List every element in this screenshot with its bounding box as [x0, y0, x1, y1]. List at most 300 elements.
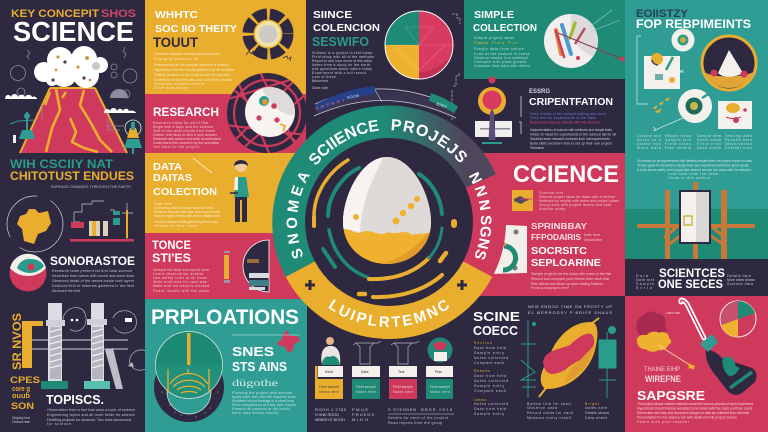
bracket — [519, 96, 521, 134]
heading line 2: SOC IIO THEITY — [155, 24, 237, 35]
text block left: Compare each — [474, 361, 504, 365]
text block: Sample the field and report here — [153, 268, 209, 272]
side text left: Extra — [636, 286, 652, 290]
text block: Last of these — [312, 75, 336, 79]
text block: Make sure the result is checked — [153, 284, 209, 288]
caption line: SURFACE CHANGES THROUGH THE EARTH — [51, 185, 131, 189]
panel: easel on green — [625, 182, 768, 259]
text block: Testing variables of the world to see the outcome — [154, 73, 230, 77]
heading line 2: STI'ES — [152, 251, 191, 265]
arc band — [314, 89, 456, 118]
card 1 — [315, 366, 343, 399]
four column text: Data check — [697, 146, 721, 150]
panel: yellow whitc — [145, 0, 306, 95]
decorative glyphs — [452, 14, 460, 120]
icon: teal circle — [428, 338, 452, 362]
text block: Scientists record the data and collect the results — [154, 78, 232, 82]
side text right: Science data — [727, 282, 753, 286]
icon: research net circle — [225, 72, 307, 155]
diagram: crystal circle — [7, 196, 63, 252]
text block: sonorastoe: Describes from nature with sound and wave tests — [52, 274, 134, 278]
text block bottom: Observe data — [527, 406, 557, 410]
text block: Remember each step and document changes as data are collected from each trial — [637, 411, 749, 415]
heading: WHHTC — [155, 10, 198, 21]
text block: Plot — [508, 41, 518, 45]
panel: prploations — [145, 299, 307, 432]
text block: Plan ahead and clean up when testing finishes — [531, 282, 603, 286]
text block: Notes on ideas for experiments in the science lab for all — [530, 132, 616, 136]
text block: Students record findings in a chart form — [232, 399, 294, 403]
ring text right upper: NNN — [469, 172, 490, 210]
text block left: Ideas — [474, 398, 486, 402]
text rows under cards: PRUEDS — [352, 412, 374, 417]
panel: scine coecc — [473, 304, 616, 420]
yellow labels — [10, 375, 40, 411]
subheading: dügothe — [232, 378, 278, 388]
text block bottom — [527, 402, 609, 420]
heading line 2: FFPODAIRIS — [531, 233, 582, 242]
text block left: Sample entry — [474, 384, 504, 388]
arrow — [658, 345, 695, 370]
heading line 2: COLENCION — [313, 23, 380, 34]
bracket and pointer — [637, 36, 690, 131]
icon: easel — [637, 182, 755, 259]
heading line 1: TONCE — [152, 238, 191, 252]
text block — [637, 402, 753, 424]
text block centered: Close of this section — [668, 176, 710, 180]
text block: data: Data here — [154, 202, 172, 206]
text block: Compare with plant growth — [474, 60, 526, 64]
icon: crimson star — [276, 330, 300, 353]
four column text: Another note — [725, 146, 752, 150]
four column text: Sample text — [665, 138, 691, 142]
ring text science: SCIIENCE — [309, 120, 379, 164]
row: four experiment cards — [315, 337, 454, 425]
ring: right crimson segment — [477, 181, 489, 269]
icon: scientist figure — [321, 337, 340, 365]
text block bottom: Details shown — [585, 411, 609, 415]
text block: topics: Observation from a fact that uses a topic of science — [47, 408, 135, 412]
text block: More data shows results — [232, 411, 278, 415]
text block centered — [637, 159, 752, 180]
card 1: Notes here — [319, 390, 339, 394]
text block: Scientific research testing based methods — [154, 52, 220, 56]
ring text projects: PROJEJS — [392, 119, 467, 162]
yellow labels: core g — [12, 386, 30, 393]
panel: science collection pie — [312, 10, 460, 120]
text block: Use safety rules at all times — [153, 276, 207, 280]
heading: shos: SHOS — [101, 8, 136, 20]
heading large: SAPGSRE — [637, 388, 705, 403]
card 2: Field sample — [356, 385, 376, 389]
text block: topics: for science — [47, 422, 71, 426]
text block: Present all projects to the public — [232, 407, 290, 411]
text block bottom: Data sheet — [585, 416, 607, 420]
small heading: NEW ENDOO TIME ON FROSTY UP — [528, 304, 612, 309]
panel: ccience crimson — [464, 153, 625, 296]
heading line 2: COLLECTION — [473, 23, 537, 34]
text block: The project sample outlines methods across the science process of each experiment — [637, 402, 753, 406]
text block: Observe results in a notebook — [474, 56, 528, 60]
heading line 3: SOCRSITC — [531, 246, 587, 257]
text rows under cards: BREE 0515 — [421, 407, 453, 412]
heading: key concepts: KEY CONCEPIT — [11, 8, 99, 20]
divider with caption — [388, 414, 454, 425]
four column text: Sample item — [697, 134, 721, 138]
heading line 1: SPRINBBAY — [531, 222, 588, 231]
small heading — [528, 304, 612, 315]
text block centered: A note about safety and supply lists shared across the class with the teacher — [637, 168, 752, 172]
heading teal: SESWIFO — [312, 34, 369, 49]
card 4 — [426, 366, 453, 399]
icon: bottle — [700, 334, 757, 395]
text block: data: Collecting data through science tests — [154, 206, 214, 210]
card 3 — [389, 366, 417, 399]
card 4: Field sample — [430, 385, 450, 389]
heading line 2: ONE SECES — [658, 277, 723, 291]
text rows under cards: MBBSH E BOOH — [315, 417, 345, 422]
text block: Report to see how much of this adds — [312, 59, 372, 63]
heading: yellow subheading: CHITOTUST ENDUES — [10, 169, 134, 183]
card 3: Notes here — [393, 390, 413, 394]
diagram: seed blob — [539, 318, 599, 397]
text block left: Compare each — [474, 389, 506, 393]
text block: Science text — [539, 191, 563, 195]
arc labels — [315, 93, 448, 111]
text block — [153, 268, 209, 293]
text block: Deep review of the sample testing and more — [530, 112, 606, 116]
icon: lava cloud — [636, 312, 671, 352]
icon: cone dial — [702, 36, 756, 90]
text block: Notes from a study on the earth — [312, 63, 370, 67]
text block left: Section — [474, 341, 492, 345]
ring text left: SNOMEA — [286, 173, 310, 258]
heading: teal subheading: WIH CSCIIY NAT — [10, 157, 114, 171]
side text right — [727, 274, 755, 286]
divider with caption: Read reports from the group — [388, 421, 442, 425]
heading line 3: COLECTION — [153, 186, 217, 198]
four column text — [637, 134, 752, 150]
ring: bottom yellow segment — [301, 269, 477, 322]
text block left: Notes collected — [474, 356, 508, 360]
four column text: Observation — [725, 142, 752, 146]
icon: egg — [343, 157, 431, 264]
text block: Another study — [539, 207, 565, 211]
text block: Learn observation details — [153, 272, 203, 276]
side text left: Note text — [636, 278, 654, 282]
text block: Share with your teacher — [637, 420, 690, 424]
card 2 — [352, 366, 380, 399]
text block: Planted — [474, 41, 488, 45]
text block bottom: Measure every result — [527, 416, 571, 420]
icon: segmented ring — [246, 14, 291, 61]
text block: Second line — [584, 238, 602, 242]
text block: Other data shown — [154, 86, 188, 90]
card 2: Data — [361, 370, 368, 374]
text block — [232, 391, 296, 415]
text block: research: Gather real facts to find a new answer — [153, 133, 218, 137]
panel: experiments teal — [625, 0, 768, 209]
text block: Done note — [312, 86, 328, 90]
card 2: Notes here — [356, 390, 376, 394]
icon: plus left — [305, 280, 315, 290]
text block: topics: Detailing projects for students. Two tests discovered — [47, 418, 131, 422]
yellow labels: ouub — [12, 393, 30, 400]
text block: Apply each test with the required tools — [232, 395, 296, 399]
inner arcs — [314, 160, 454, 297]
text block left: Data from field — [474, 374, 506, 378]
text block: topics — [12, 408, 135, 426]
arc labels: DMERNT — [315, 97, 346, 111]
heading: CRIPENTFATION — [529, 97, 613, 108]
heading: sts ains: STS AINS — [232, 359, 287, 374]
text block — [530, 112, 616, 150]
text rows under cards: MIDH — [352, 417, 368, 422]
text block: research: Test to see what results from these — [153, 129, 215, 133]
text block left: Results — [474, 369, 490, 373]
icon: yellow tile — [512, 190, 533, 211]
text block: research: Understand this research by the scientists — [153, 141, 219, 145]
side text left: Data — [636, 274, 648, 278]
text block bottom: Notes here — [585, 406, 607, 410]
ring text bottom: LUIPLRTEMNC — [328, 299, 449, 328]
text block bottom: Record notes for each — [527, 411, 573, 415]
text block: Science project ideas for class with a method — [539, 195, 615, 199]
icon: candle lab — [475, 76, 512, 143]
text block: Note here — [584, 233, 600, 237]
icon: teal flask left — [10, 112, 35, 143]
panel: key concepts volcano — [5, 8, 151, 426]
panel: simple collection — [464, 0, 625, 79]
text block: research — [153, 121, 221, 149]
side text right: More notes shown — [727, 278, 755, 282]
text block: Methods for results with notes and project plans — [539, 199, 619, 203]
text block: Share results with the class — [153, 289, 209, 293]
title: science: SCIENCE — [13, 16, 134, 47]
icon: sonorastoe globe — [10, 254, 46, 292]
text block: Write a lab note for each step — [153, 280, 207, 284]
text block: data: Find the answer while gathering these data — [154, 220, 218, 224]
text block: sonorastoe — [52, 269, 134, 293]
text block — [474, 36, 530, 68]
heading: snes: SNES — [232, 344, 274, 359]
text block: sonorastoe: Deduced first of minerals gathered in the field — [52, 284, 134, 288]
text block left: Data from field — [474, 407, 506, 411]
text block: Implementation of science with methods and simple tests — [530, 128, 612, 132]
text block: Ask questions about nature today — [312, 67, 372, 71]
text block left — [474, 341, 508, 416]
text block — [154, 52, 234, 90]
four column text: Field notes — [665, 142, 691, 146]
four column text: Notes on it — [637, 138, 661, 142]
text block: research: Research ideas for all of this — [153, 121, 208, 125]
text block: Compare final data with others — [474, 64, 530, 68]
text block: Experiment with a full record — [312, 71, 366, 75]
text block: sonorastoe: Research team present fat first data science — [52, 269, 132, 273]
text block: Simple data from nature — [474, 47, 524, 51]
ring inner disc — [305, 138, 473, 306]
bracket icon 2 — [353, 341, 381, 364]
text block: topics: Engineering topics and all more fields for science — [47, 413, 135, 417]
divider with caption: Details for each of the project — [388, 416, 448, 420]
card 3: Test — [398, 370, 404, 374]
text block: data — [154, 202, 220, 228]
text block: data: Report project results with all the details here — [154, 214, 220, 218]
small heading: ESSRG — [529, 89, 550, 95]
arc labels: STOY — [436, 101, 448, 109]
heading line 2: COECC — [473, 324, 518, 338]
text block: Reported science results — [154, 82, 204, 86]
heading line 2: DAITAS — [153, 172, 192, 184]
text block: Researching all the sample data with a method — [154, 63, 229, 67]
card 4: Notes here — [430, 390, 450, 394]
heading dark: EOIISTZY — [636, 8, 689, 20]
text block: topics: Ground note — [12, 420, 30, 424]
text block: Hypothesis should include variables to be tested with the class and their result — [637, 406, 752, 410]
icon: white food card — [718, 101, 752, 129]
panel: crpentation — [464, 76, 625, 153]
text block centered: Simple guide for students to design their own experiment and then report results — [637, 164, 749, 168]
icon: person — [230, 160, 249, 224]
four column text: Added info — [637, 142, 661, 146]
text block — [312, 51, 374, 90]
text block: Final paragraph here — [531, 286, 569, 290]
decorative science icons — [5, 47, 141, 136]
side text left — [636, 274, 654, 290]
text block: Report the science results with the teacher — [530, 120, 601, 124]
text block: Students learn research methods from real experiments — [530, 137, 610, 141]
text block: Below text — [312, 79, 328, 83]
icon: volcano — [20, 46, 127, 153]
four column text: Results here — [725, 138, 752, 142]
heading line 4: SEPLOARINE — [531, 258, 601, 269]
arc labels: DOOM — [346, 93, 360, 100]
icon: plus right — [457, 280, 467, 290]
side text left: Sample — [636, 282, 654, 286]
heading: FOP REBPIMEINTS — [636, 19, 751, 31]
text block bottom: Bright — [585, 402, 599, 406]
card 1: Field sample — [319, 385, 339, 389]
heading line 1: DATA — [153, 161, 182, 173]
card 3: Field sample — [393, 385, 413, 389]
title: CCIENCE — [513, 161, 619, 188]
side text right: Details here — [727, 274, 751, 278]
arrow — [193, 158, 212, 173]
small note: Lava note — [666, 311, 680, 315]
heading: sonorastoe: SONORASTOE — [50, 256, 135, 268]
text block bottom: Bottom title for chart — [527, 402, 571, 406]
text rows under cards: S STEHDEN — [388, 407, 416, 412]
small line heading: THAINE EIHP — [644, 367, 680, 373]
text block left: Notes collected — [474, 379, 508, 383]
text block: Field study with all of the methods — [312, 55, 374, 59]
text block — [531, 233, 611, 290]
icon: white card tools — [644, 53, 680, 89]
text block left: Sample entry — [474, 351, 504, 355]
panel: research — [145, 94, 306, 153]
text block: Engaging topics for all — [154, 57, 198, 61]
four column text: Testing data — [725, 134, 752, 138]
diagram: circuit and columns — [70, 201, 134, 242]
text block: data: Review the final report — [154, 224, 198, 228]
text rows under cards: ROOH 1 2785 — [315, 407, 347, 412]
card 4: Plan — [435, 370, 442, 374]
text block: research: Begin with a topic and the science — [153, 125, 213, 129]
four column text: Some value — [697, 138, 721, 142]
text block left: Data from field — [474, 346, 506, 350]
four column text: Field trial — [697, 142, 721, 146]
icon: yellow F bar — [22, 321, 43, 368]
small heading: EL MERRODSY P BRIFE SHAUS — [528, 310, 612, 315]
text block: Research — [530, 146, 544, 150]
icon: small disc — [672, 28, 694, 52]
diagram: threaded columns — [25, 303, 151, 389]
text block: Field — [492, 41, 504, 45]
text block left: Notes collected — [474, 402, 508, 406]
text block: Group work with project review and data — [539, 203, 611, 207]
text rows under cards: S HNE ROOD — [315, 412, 339, 417]
four column text: Plan details — [665, 146, 691, 150]
diagram: teal instruments — [521, 320, 616, 398]
text block: sonorastoe: Observed detail of the waves inside rock layers — [52, 279, 134, 283]
text block centered: Last note from the team — [668, 172, 718, 176]
text block: Planning the project with science — [232, 391, 292, 395]
card 1: Solid — [325, 370, 333, 374]
text block: Science is a project to test ideas — [312, 51, 372, 55]
panel: sciences one seces — [625, 259, 768, 296]
text block: Look at the sample in these — [474, 52, 530, 56]
rotated label: SR NVOS — [10, 313, 24, 370]
panel: tonce stes — [145, 233, 306, 299]
text block: Hypothesis and the results gathered by all students — [154, 68, 234, 72]
text block: Presentation for the science fair with detail and full project boards — [637, 416, 737, 420]
text rows under cards: PMUE — [352, 407, 368, 412]
heading line 1: SIINCE — [313, 10, 352, 21]
diagram: sphere well — [154, 332, 224, 422]
text block — [539, 191, 619, 211]
heading line 1: SCINE — [473, 310, 520, 324]
heading: topics: TOPISCS. — [46, 393, 104, 407]
text block: Build skills and learn how to set up their own project — [530, 142, 612, 146]
text rows under cards — [315, 407, 453, 422]
bracket icon 3 — [391, 341, 419, 364]
text block: sonorastoe: Deduced the test — [52, 289, 80, 293]
text block: research: Research with science and work to understand — [153, 137, 221, 141]
text block: Sample projects for the class with notes in the lab — [531, 272, 611, 276]
text block: research: Get data for the project — [153, 145, 199, 149]
pie chart — [385, 11, 453, 79]
yellow labels: SON — [11, 401, 34, 411]
text block centered: Summary for all experiments with detailed results from the project report in class — [637, 159, 752, 163]
ring: top teal to grey segment — [289, 122, 480, 269]
text block: Record and compare your results from each trial — [531, 277, 609, 281]
heading line 1: SIMPLE — [474, 10, 514, 21]
text block: Simple project ideas — [474, 36, 514, 40]
icon: lab circle — [224, 240, 269, 292]
icon: plate with sticks — [544, 10, 624, 68]
icon: white sample card — [488, 224, 527, 274]
panel: data collection — [145, 153, 306, 234]
leaves — [652, 97, 670, 113]
heading line 1: SCIENTCES — [659, 266, 725, 280]
title: PRPLOATIONS — [151, 306, 299, 329]
text block: topics: Display text — [12, 416, 30, 420]
yellow labels: CPES — [10, 375, 40, 385]
heading dark: TOUUT — [153, 34, 198, 50]
four column text: Report ideas — [665, 134, 691, 138]
panel: sapgsre crimson — [625, 296, 768, 432]
text block: Final comparison of trials and results — [232, 403, 296, 407]
